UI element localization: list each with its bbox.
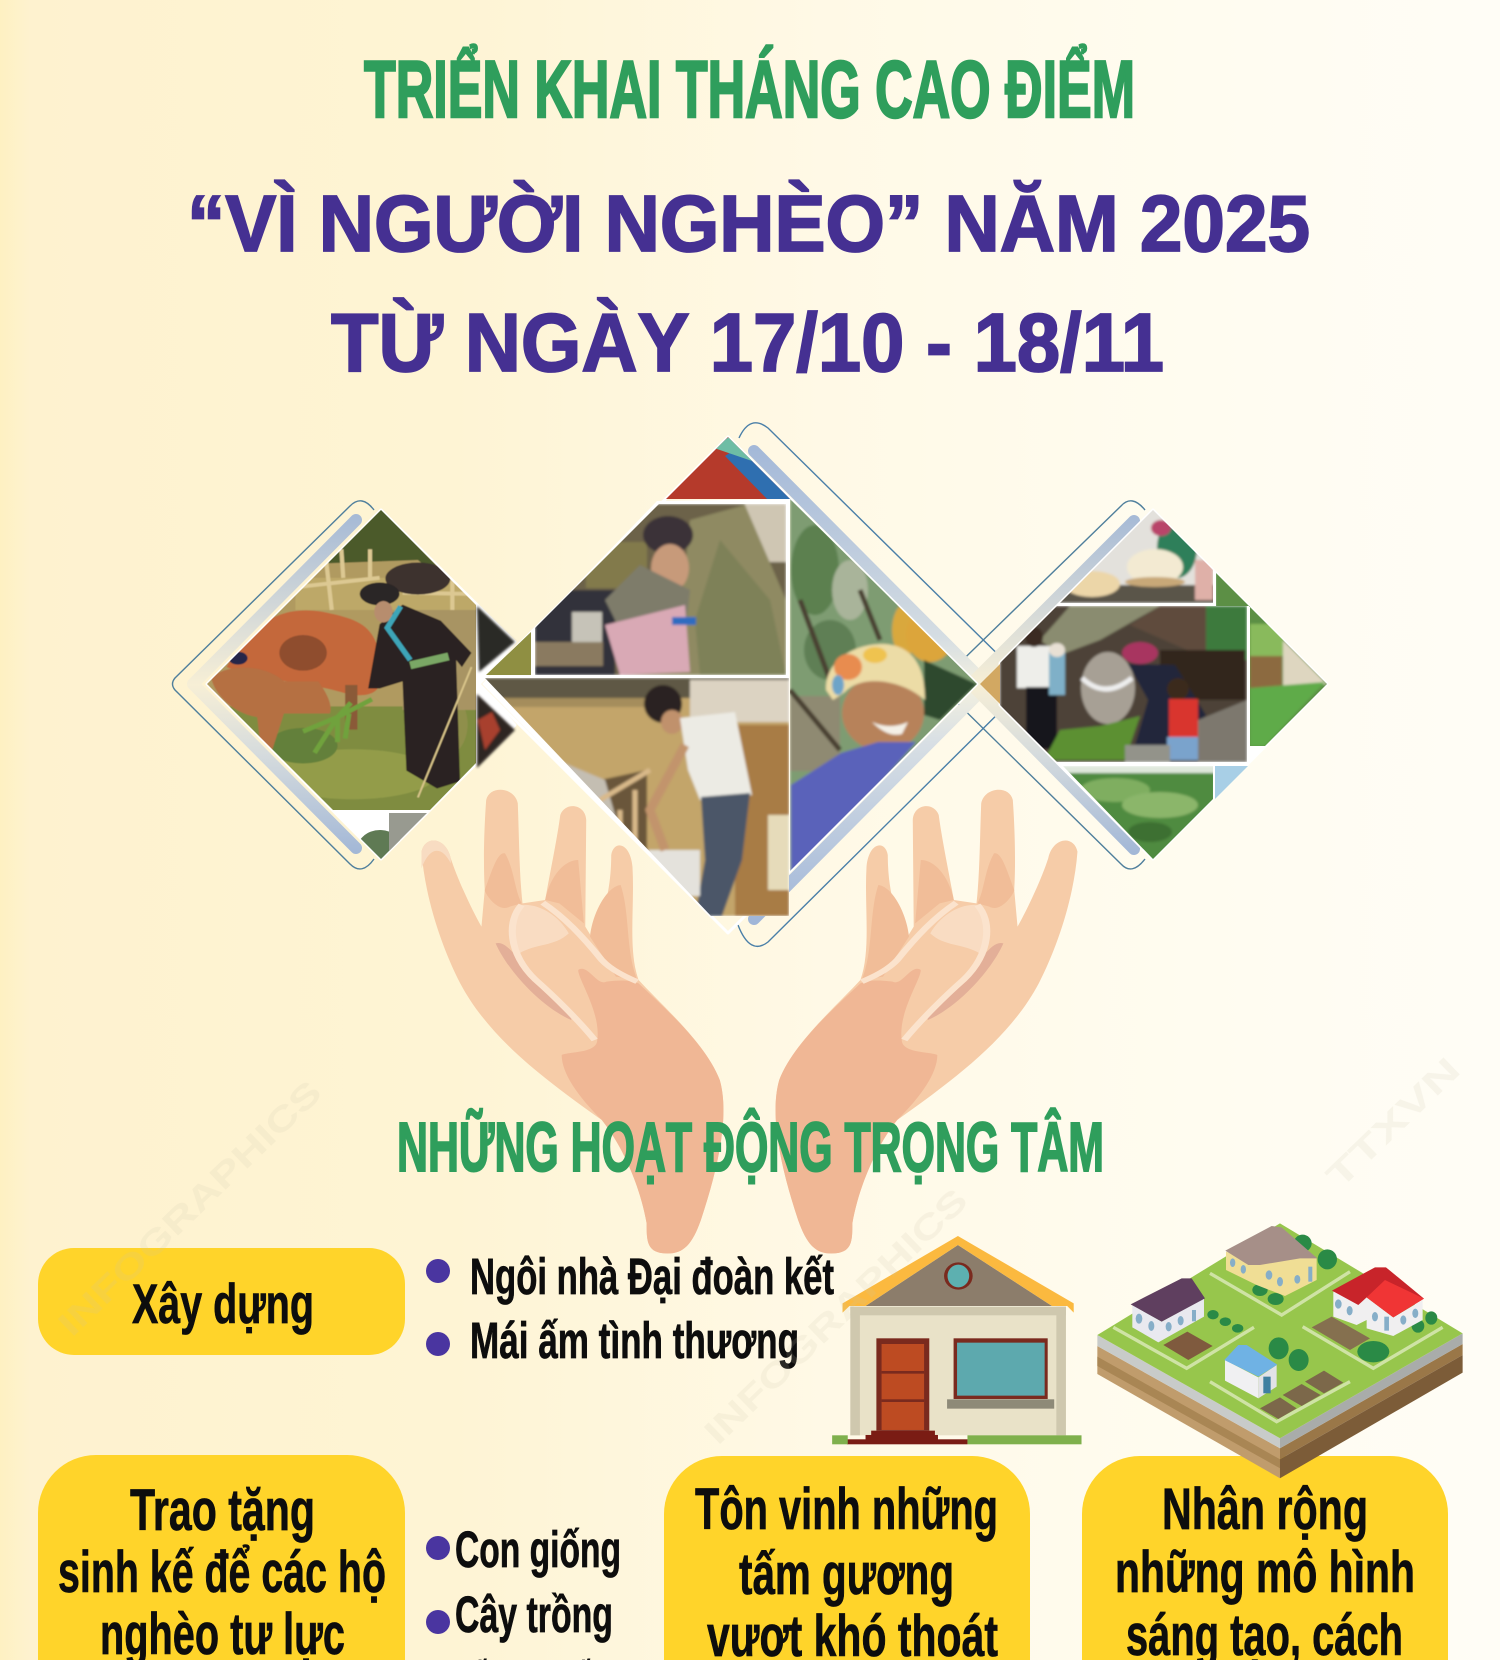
watermark: TTXVN <box>1319 1050 1468 1196</box>
photo: rice winnowing <box>1060 510 1213 603</box>
hands illustration <box>422 790 1077 1253</box>
photo: tea hill <box>1060 766 1215 861</box>
right hand <box>776 790 1077 1253</box>
photo: red table with notebook <box>666 437 790 499</box>
card: livelihood gifts: sinh kế để các hộ <box>58 1540 386 1605</box>
photo: woman making brooms <box>535 504 786 675</box>
title line 2: “VÌ NGƯỜI NGHÈO” NĂM 2025 <box>187 179 1310 268</box>
pill: Xây dựng: Xây dựng <box>132 1272 314 1335</box>
pill: Xây dựng <box>38 1248 405 1355</box>
left hand <box>422 790 723 1253</box>
card: honouring role models: tấm gương <box>739 1542 954 1607</box>
icon: isometric village <box>1097 1223 1463 1478</box>
list: building activities: Mái ấm tình thương <box>470 1312 799 1369</box>
photo: grass fragment <box>486 632 531 675</box>
list: building activities <box>426 1248 834 1369</box>
left photo diamond <box>204 506 515 874</box>
photo: small blue <box>1215 766 1248 799</box>
list: livelihood items: Con giống <box>455 1521 621 1578</box>
photo: side fragments <box>477 606 515 768</box>
photo: yellow fragment <box>980 664 1000 704</box>
list: building activities: Ngôi nhà Đại đoàn kết <box>470 1248 834 1305</box>
list: livelihood items: Cây trồng <box>455 1586 613 1643</box>
icon: house <box>832 1236 1082 1444</box>
watermark: INFOGRAPHICS <box>51 1073 329 1344</box>
watermark <box>51 1050 1468 1452</box>
card: honouring role models: Tôn vinh những <box>695 1477 998 1542</box>
photo: cattle and grass <box>1216 573 1327 746</box>
card: livelihood gifts: Trao tặng <box>130 1478 315 1543</box>
card: honouring role models <box>664 1456 1030 1660</box>
right photo diamond <box>980 505 1330 861</box>
card: livelihood gifts <box>38 1455 405 1660</box>
photo: small bottom strip <box>360 813 427 859</box>
photo: family with buffalo <box>1000 606 1247 762</box>
watermark: INFOGRAPHICS <box>697 1181 975 1452</box>
photo: smiling farmer woman <box>790 495 980 875</box>
card: replicating models <box>1082 1456 1448 1660</box>
title line 3: TỪ NGÀY 17/10 - 18/11 <box>331 296 1164 389</box>
photo: woman feeding cattle <box>204 506 483 814</box>
center photo diamond <box>478 430 980 933</box>
card: replicating models: Nhân rộng <box>1162 1477 1368 1542</box>
photo: man tending pigs <box>478 678 789 916</box>
list: livelihood items <box>426 1521 621 1660</box>
diamond outlines and bands <box>172 423 1145 946</box>
